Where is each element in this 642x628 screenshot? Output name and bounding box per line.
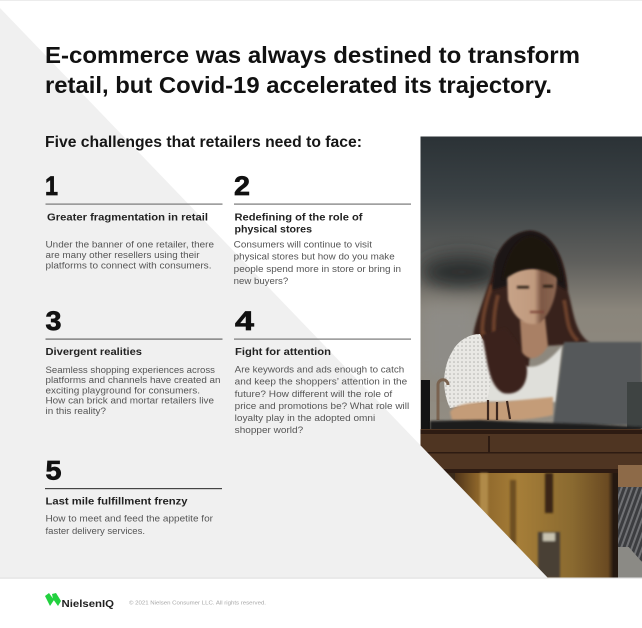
heading 2: Redefining of the role of: [234, 212, 363, 224]
body 3: [46, 365, 221, 417]
table clutter: [430, 420, 642, 431]
woman: hair falling over shirt: [482, 328, 527, 394]
body 4: price and promotions be? What role will: [235, 401, 409, 412]
body 1: [46, 240, 214, 271]
challenge 5: [45, 456, 222, 537]
table leg: [448, 473, 455, 482]
table leg grain: [480, 473, 560, 578]
photo wall shadow: [420, 248, 496, 365]
body 1: Under the banner of one retailer, there: [46, 240, 214, 250]
heading 2: [234, 212, 363, 236]
woman: hair curls: [479, 284, 580, 342]
table leg wood: [455, 473, 635, 578]
rule 4: [234, 338, 411, 340]
woman: bracelets: [488, 400, 510, 420]
number 3: 3: [46, 306, 62, 336]
laptop: [553, 342, 642, 425]
logo mark: [45, 593, 61, 606]
photo wall: [420, 136, 642, 436]
glass: [627, 382, 642, 428]
body 2: [234, 239, 401, 287]
rule 2: [234, 204, 411, 205]
table plank shading: [420, 430, 642, 474]
body 5: How to meet and feed the appetite for: [46, 514, 214, 525]
woman: eyes and mouth: [517, 285, 553, 313]
number 1: 1: [45, 171, 58, 201]
woman: face: [507, 268, 557, 324]
challenge 4: [234, 306, 411, 436]
grey diagonal background triangle: [0, 8, 548, 578]
photo: woman working at a laptop: [420, 136, 642, 578]
body 5: [46, 514, 214, 537]
background right of table: [618, 465, 642, 578]
logo wordmark: NielsenIQ: [62, 598, 114, 610]
body 4: future? How different will the role of: [235, 389, 393, 400]
body 2: new buyers?: [234, 276, 288, 287]
body 4: shopper world?: [235, 425, 303, 436]
body 4: and keep the shoppers’ attention in the: [235, 377, 407, 388]
copyright: © 2021 Nielsen Consumer LLC. All rights reserved.: [129, 600, 266, 606]
body 2: physical stores but how do you make: [234, 252, 395, 262]
woman: shirt: [470, 339, 562, 402]
body 4: loyalty play in the adopted omni: [235, 413, 375, 424]
woman: neck: [520, 318, 548, 358]
number 4: 4: [235, 306, 254, 336]
top edge line: [0, 0, 642, 1]
body 5: faster delivery services.: [46, 526, 145, 537]
challenge 1: [45, 171, 222, 271]
body 1: platforms to connect with consumers.: [46, 260, 211, 271]
footer divider: [0, 578, 642, 579]
rule 1: [46, 204, 222, 205]
challenge 2: [234, 171, 411, 287]
body 2: Consumers will continue to visit: [234, 239, 372, 250]
heading 3: Divergent realities: [46, 346, 142, 358]
body 1: are many other resellers using their: [46, 250, 200, 261]
body 2: people spend more in store or bring in: [234, 264, 401, 275]
heading 4: Fight for attention: [235, 346, 331, 358]
woman: fringe: [502, 236, 562, 282]
woman: lace sleeve: [444, 334, 491, 408]
body 3: How can brick and mortar retailers live: [46, 396, 214, 407]
number 2: 2: [234, 171, 250, 201]
title: E-commerce was always destined to transform: [45, 42, 580, 68]
body 3: exciting playground for consumers.: [46, 386, 200, 396]
title: [45, 42, 580, 98]
heading 1: Greater fragmentation in retail: [47, 212, 208, 224]
body 3: in this reality?: [46, 406, 106, 417]
subheading: Five challenges that retailers need to face:: [45, 134, 362, 151]
heading 5: Last mile fulfillment frenzy: [46, 495, 188, 507]
chair and black object: [421, 380, 448, 432]
body 4: [235, 364, 409, 436]
number 5: 5: [46, 456, 62, 486]
rule 3: [46, 338, 222, 340]
woman: arm: [450, 397, 553, 421]
rule 5: [45, 488, 222, 489]
table top: [420, 429, 642, 469]
body 3: Seamless shopping experiences across: [46, 365, 215, 376]
title: retail, but Covid-19 accelerated its trajectory.: [45, 72, 552, 98]
heading 2: physical stores: [234, 224, 312, 236]
body 4: Are keywords and ads enough to catch: [235, 364, 404, 376]
woman: hair crown: [492, 231, 566, 290]
challenge 3: [46, 306, 222, 417]
woman: hair back: [472, 230, 590, 368]
body 3: platforms and channels have created an: [46, 375, 221, 386]
logo: NielsenIQ: [45, 593, 114, 610]
